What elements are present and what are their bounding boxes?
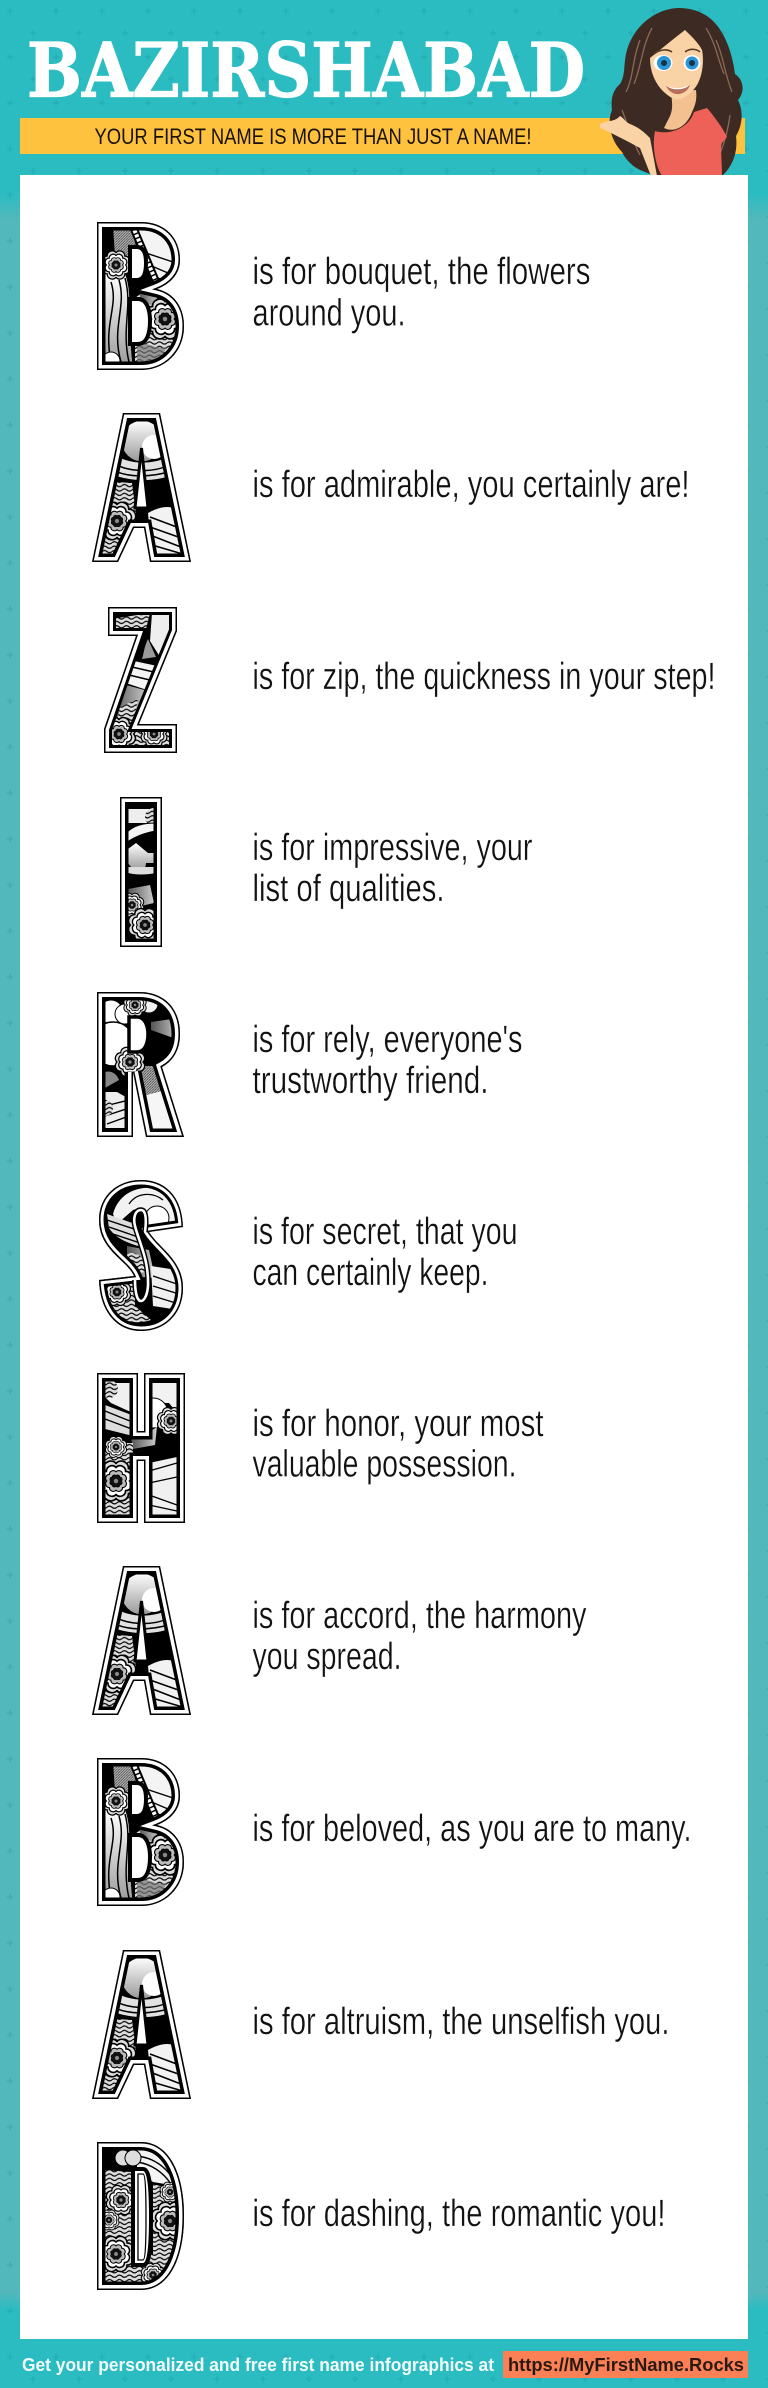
letter Z bbox=[103, 607, 179, 755]
row: H is for honor bbox=[96, 1373, 544, 1523]
row: B is for bouquet bbox=[97, 222, 590, 372]
text: secret: is for secret, that you bbox=[252, 1211, 518, 1253]
text: honor: is for honor, your most bbox=[252, 1403, 544, 1445]
row: I is for impressive bbox=[120, 797, 533, 947]
text: accord: you spread. bbox=[252, 1636, 402, 1678]
text: honor: valuable possession. bbox=[252, 1444, 516, 1486]
text: secret: can certainly keep. bbox=[252, 1252, 488, 1294]
eyes bbox=[654, 49, 700, 71]
text: bouquet bbox=[252, 251, 590, 334]
letter A bbox=[92, 1950, 192, 2100]
text: impressive bbox=[252, 827, 533, 910]
banner bbox=[20, 118, 745, 154]
text: secret bbox=[252, 1211, 518, 1294]
text: honor bbox=[252, 1403, 544, 1486]
letter I bbox=[120, 797, 163, 947]
row: A is for accord bbox=[92, 1566, 586, 1716]
row: Z is for zip bbox=[103, 607, 715, 755]
text: impressive: list of qualities. bbox=[252, 868, 444, 910]
row: S is for secret bbox=[99, 1180, 518, 1332]
text: rely bbox=[252, 1019, 522, 1102]
row: R is for rely bbox=[91, 992, 522, 1140]
smile bbox=[666, 85, 690, 94]
text: accord bbox=[252, 1595, 586, 1678]
letter S bbox=[99, 1180, 185, 1332]
letter R bbox=[91, 992, 187, 1140]
letter A bbox=[92, 1566, 192, 1716]
title: BAZIRSHABAD bbox=[27, 26, 585, 114]
text: rely: is for rely, everyone's bbox=[252, 1019, 522, 1061]
text: impressive: is for impressive, your bbox=[252, 827, 533, 869]
footer text: Get your personalized and free first name infographics at bbox=[22, 2355, 494, 2375]
banner text: YOUR FIRST NAME IS MORE THAN JUST A NAME! bbox=[94, 124, 532, 149]
text: bouquet: around you. bbox=[252, 292, 406, 334]
row: D is for dashing bbox=[97, 2142, 666, 2292]
row: B is for beloved bbox=[97, 1758, 692, 1908]
link badge: https://MyFirstName.Rocks bbox=[508, 2355, 744, 2375]
letter H bbox=[96, 1373, 185, 1523]
letter D bbox=[97, 2142, 189, 2292]
text: rely: trustworthy friend. bbox=[252, 1060, 488, 1102]
row: A is for admirable bbox=[92, 413, 690, 563]
footer bbox=[22, 2351, 748, 2378]
letter A bbox=[92, 413, 192, 563]
text: accord: is for accord, the harmony bbox=[252, 1595, 586, 1637]
text: bouquet: is for bouquet, the flowers bbox=[252, 251, 590, 293]
row: A is for altruism bbox=[92, 1950, 670, 2100]
illustration: woman presenting bbox=[600, 8, 743, 176]
letter B bbox=[97, 222, 187, 372]
letter B bbox=[97, 1758, 187, 1908]
